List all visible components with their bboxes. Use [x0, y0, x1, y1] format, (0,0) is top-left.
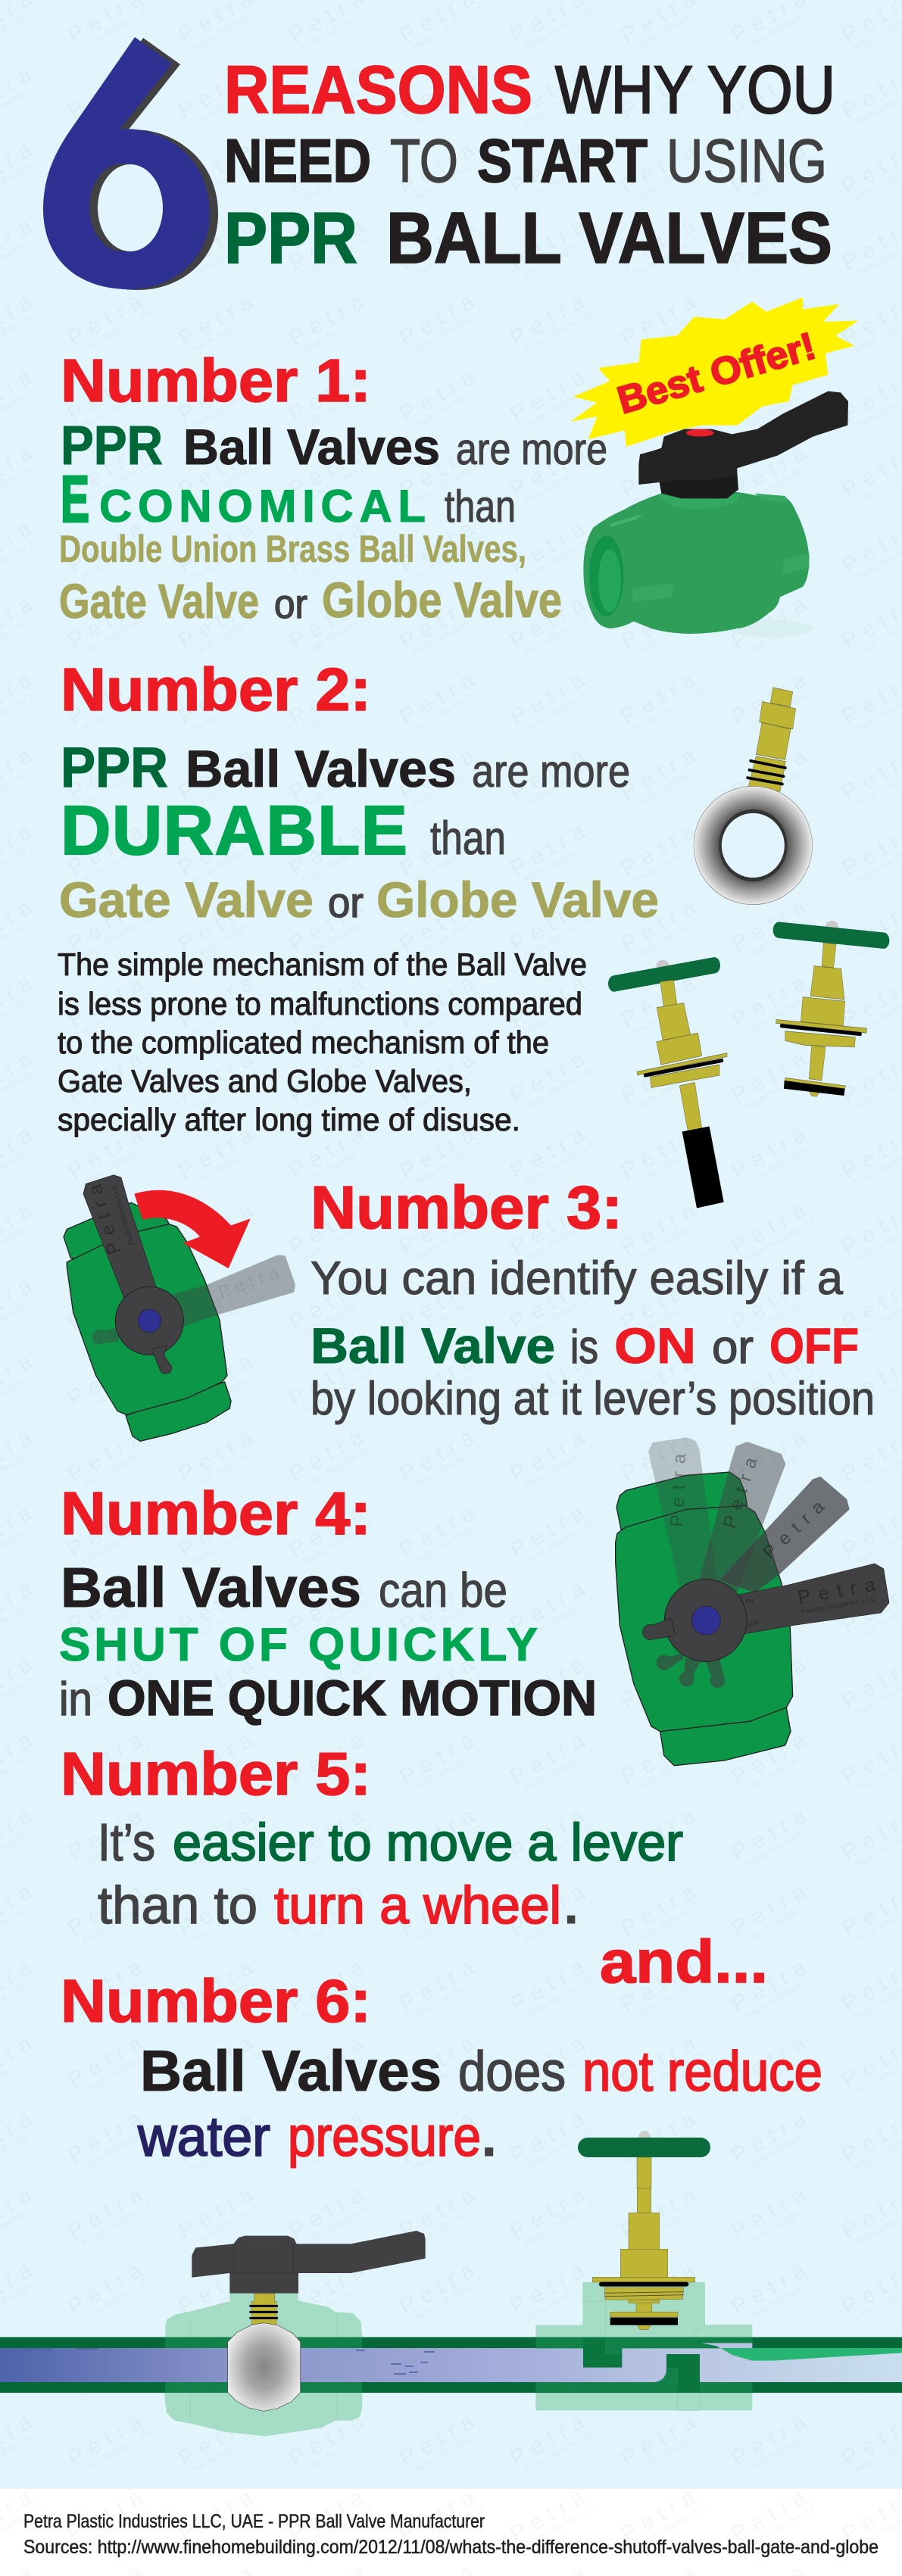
big number six	[43, 37, 218, 290]
section 2 paragraph: is less prone to malfunctions compared	[58, 986, 582, 1021]
section 2 text: Ball Valves	[186, 740, 456, 798]
globe valve stem	[592, 2188, 695, 2330]
icon: globe valve stem	[776, 921, 884, 1096]
section 2 heading: Number 2:	[61, 656, 371, 723]
section 3 text: ON	[614, 1318, 696, 1374]
section 5 text: .	[564, 1878, 578, 1934]
section 5 text: than to	[98, 1876, 257, 1935]
section 2 paragraph: to the complicated mechanism of the	[58, 1024, 549, 1060]
ball valve body	[164, 2293, 362, 2436]
section 3 text: You can identify easily if a	[311, 1252, 844, 1305]
icon: valve with lever sweep: Petra	[667, 1453, 690, 1527]
globe valve body	[535, 2282, 752, 2410]
section 4 text: Ball Valves	[61, 1556, 361, 1619]
section 2 text: PPR	[61, 735, 168, 799]
globe valve handle	[578, 2131, 710, 2188]
icon: valve with lever sweep: ON	[745, 1598, 754, 1605]
section 1 text: Gate Valve	[59, 574, 259, 628]
title: BALL VALVES	[386, 198, 832, 279]
section 2 text: are more	[472, 746, 630, 797]
section 6 text: not reduce	[582, 2040, 822, 2103]
icon: ball and stem cutaway	[694, 688, 813, 905]
title	[224, 51, 835, 279]
icon: valve with lever sweep: Petra	[719, 1455, 762, 1531]
icon: valve on/off lever with arrow: Plastic Industries LLC	[110, 1185, 136, 1246]
icon: best offer starburst	[570, 298, 858, 447]
section 6 text	[137, 2039, 822, 2168]
section 1 text: than	[445, 482, 516, 532]
section 1 text: E	[61, 463, 89, 536]
section 2 text: Globe Valve	[376, 872, 659, 928]
title: NEED	[224, 127, 371, 195]
globe valve internals and restricted flow	[535, 2337, 902, 2392]
section 6 text: does	[458, 2040, 566, 2103]
section 5 text: It’s	[98, 1813, 155, 1872]
section 1 text: Ball Valves	[183, 419, 440, 475]
section 2 paragraph: specially after long time of disuse.	[58, 1102, 520, 1137]
section 2 text: than	[430, 812, 506, 865]
section 2 text: Gate Valve	[59, 872, 314, 928]
section 2 text: or	[328, 878, 364, 926]
section 3 heading: Number 3:	[311, 1174, 623, 1241]
icon: valve on/off lever with arrow: Petra	[85, 1181, 126, 1256]
section 1 text	[59, 416, 607, 628]
section 4 heading: Number 4:	[61, 1480, 371, 1547]
footer band	[0, 2489, 902, 2576]
section 6 text: pressure	[288, 2105, 481, 2168]
section 1 text: Double Union Brass Ball Valves,	[59, 528, 526, 570]
icon: valve on/off lever with arrow	[64, 1175, 295, 1441]
title: REASONS	[224, 51, 532, 127]
title: USING	[666, 127, 827, 195]
section 2 text	[59, 735, 659, 928]
icon: valve with lever sweep: Plastic Industries LLC	[801, 1595, 876, 1616]
section 6 text: Ball Valves	[140, 2039, 442, 2104]
section 3 text: OFF	[769, 1318, 859, 1374]
icon: valve with lever sweep: Petra	[796, 1574, 878, 1608]
section 1 heading: Number 1:	[61, 347, 371, 414]
section 5 heading: Number 5:	[61, 1740, 371, 1807]
icon: valve with lever sweep: OFF	[748, 1620, 759, 1627]
section 5 text	[98, 1813, 683, 1935]
section 1 text: or	[274, 582, 307, 627]
section 4 text: can be	[379, 1563, 507, 1617]
section 3 text: or	[712, 1321, 754, 1374]
ball valve internals	[192, 2231, 426, 2411]
section 1 text: PPR	[61, 416, 163, 476]
section 1 text: CONOMICAL	[99, 481, 426, 532]
section 4 text: SHUT OF QUICKLY	[59, 1619, 538, 1671]
section 4 text	[59, 1556, 597, 1726]
icon: PPR ball valve photo	[583, 391, 848, 638]
title: START	[477, 127, 648, 195]
section 3 text	[311, 1252, 875, 1425]
icon: valve with lever sweep	[616, 1437, 889, 1766]
section 6 text: water	[137, 2105, 270, 2168]
section 1 text: are more	[456, 425, 607, 474]
title: WHY YOU	[555, 51, 835, 127]
section 2 paragraph: The simple mechanism of the Ball Valve	[58, 947, 587, 982]
pipe with water	[0, 2337, 902, 2393]
section 2 paragraph: Gate Valves and Globe Valves,	[58, 1063, 472, 1099]
title: TO	[390, 127, 458, 195]
and ellipsis: and...	[600, 1928, 768, 1995]
icon: valve on/off lever with arrow: Petra	[215, 1262, 282, 1302]
footer credits	[23, 2511, 879, 2558]
section 5 text: turn a wheel	[274, 1876, 561, 1935]
section 6 text: .	[482, 2108, 496, 2167]
section 2 text: DURABLE	[61, 792, 407, 869]
section 5 text: easier to move a lever	[173, 1813, 683, 1872]
footer credits: Petra Plastic Industries LLC, UAE - PPR Ball Valve Manufacturer	[23, 2511, 485, 2532]
icon: valve with lever sweep: Petra	[759, 1496, 829, 1563]
section 6 heading: Number 6:	[61, 1967, 371, 2035]
section 3 text: Ball Valve	[311, 1318, 555, 1374]
section 3 text: is	[570, 1321, 598, 1374]
section 2 paragraph	[58, 947, 587, 1137]
section 4 text: in	[59, 1673, 92, 1726]
icon: best offer starburst: Best Offer!	[613, 323, 820, 422]
section 1 text: Globe Valve	[322, 572, 562, 628]
icon: gate valve stem	[614, 960, 727, 1208]
title: PPR	[224, 198, 357, 279]
section 4 text: ONE QUICK MOTION	[108, 1670, 597, 1726]
